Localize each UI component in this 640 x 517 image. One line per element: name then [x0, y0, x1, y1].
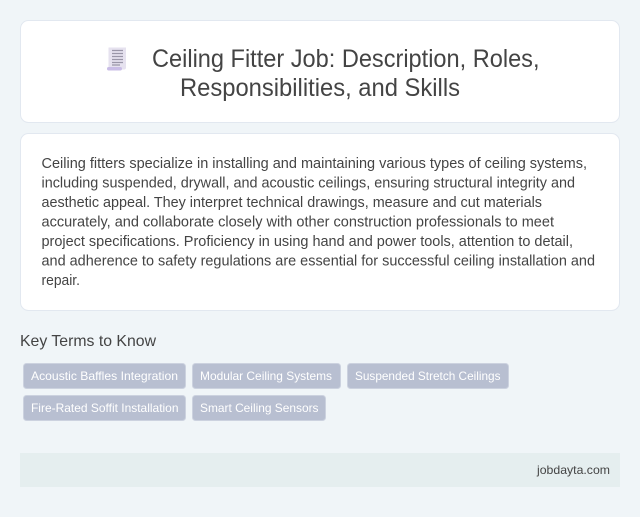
footer source: jobdayta.com	[536, 463, 610, 477]
tag: modular ceiling	[192, 364, 340, 388]
title: Responsibilities, and Skills	[180, 74, 460, 102]
title: Ceiling Fitter Job: Description, Roles,	[152, 45, 540, 73]
tag: smart ceiling sensors	[192, 396, 326, 420]
description text: project specifications. Proficiency in using hand and power tools, attention to detail,	[42, 234, 573, 250]
tag: acoustic baffles	[24, 364, 186, 388]
tag: suspended stretch: Suspended Stretch Ceilings	[355, 369, 500, 383]
tag: modular ceiling: Modular Ceiling Systems	[200, 369, 332, 383]
tag: suspended stretch	[348, 364, 508, 388]
description text: repair.	[42, 273, 80, 289]
description text: accurately, and collaborate closely with other construction professionals to meet	[42, 215, 554, 231]
icon: document scroll	[107, 48, 126, 70]
description text: including suspended, drywall, and acoustic ceilings, ensuring structural integrity and	[42, 176, 575, 192]
tag: fire-rated soffit	[24, 396, 186, 420]
tags: key terms	[24, 364, 508, 420]
footer bar	[20, 453, 620, 487]
description text: Ceiling fitters specialize in installing and maintaining various types of ceiling systems,	[42, 156, 587, 172]
description text: aesthetic appeal. They interpret technical drawings, measure and cut materials	[42, 195, 542, 211]
tag: acoustic baffles: Acoustic Baffles Integration	[31, 369, 178, 383]
tag: fire-rated soffit: Fire-Rated Soffit Installation	[31, 401, 178, 415]
panel: description	[20, 134, 620, 310]
heading: key terms: Key Terms to Know	[20, 333, 156, 350]
description text: and adherence to safety regulations are essential for successful ceiling installation and	[42, 254, 595, 270]
panel: title card	[20, 20, 620, 122]
description text	[42, 156, 595, 289]
title	[152, 45, 540, 102]
tag: smart ceiling sensors: Smart Ceiling Sensors	[200, 401, 318, 415]
